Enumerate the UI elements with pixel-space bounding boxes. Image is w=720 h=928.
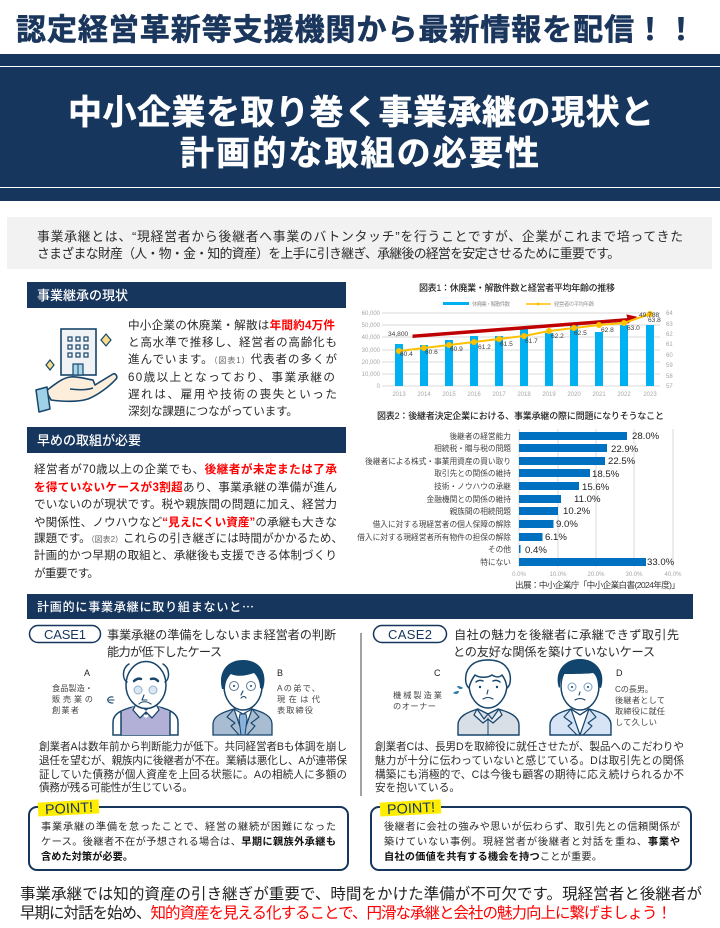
- case 1 description: 証していた債務が個人資産を上回る状態に。Aの相続人に多額の: [39, 768, 347, 781]
- chart: succession issues: 相続税・贈与税の問題: [434, 443, 511, 453]
- chart: closures and average age: 62.2: [551, 333, 564, 340]
- text block: current state: 進んでいます。（図表1）代表者の多くが: [128, 352, 337, 366]
- chart: succession issues: 18.5%: [592, 469, 620, 480]
- chart: closures and average age: 60,000: [362, 311, 381, 317]
- tag: POINT 2: POINT!: [387, 799, 435, 817]
- panel: point 1: 事業承継の準備を怠ったことで、経営の継続が困難になった: [41, 820, 336, 833]
- chart: succession issues: 金融機関との関係の維持: [426, 494, 511, 504]
- chart: closures and average age: 58: [666, 374, 673, 380]
- person B label: B: [277, 668, 283, 678]
- panel: point 2: 築けていない事例。現経営者が後継者と対話を重ね、事業や: [384, 835, 680, 848]
- case 2 description: [375, 740, 684, 794]
- chart: closures and average age: 63.0: [627, 325, 640, 332]
- chart: succession issues: 後継者の経営能力: [449, 431, 511, 441]
- text block: early action: [34, 462, 343, 580]
- section heading: if not planned: [27, 594, 693, 619]
- chart: succession issues: 取引先との関係の維持: [434, 468, 511, 478]
- person C label: [393, 668, 442, 711]
- text block: early action: 計画的かつ早期の取組と、承継後も支援できる体制づくり: [34, 548, 337, 562]
- case 2 description: 構築にも消極的で、Cは今後も顧客の期待に応え続けられるか不: [375, 768, 684, 781]
- person D label: D: [616, 668, 623, 678]
- chart: succession issues: 28.0%: [632, 431, 660, 442]
- text block: current state: 60歳以上となっており、事業承継の: [128, 371, 335, 384]
- chart: succession issues: 15.6%: [582, 482, 610, 493]
- chart: closures and average age: 2020: [567, 392, 581, 398]
- chart: closures and average age: 61.2: [478, 344, 491, 351]
- panel: point 1: 含めた対策が必要。: [41, 850, 133, 863]
- chart: closures and average age: 2014: [417, 392, 431, 398]
- person D label: [615, 668, 665, 727]
- chart: closures and average age: 2016: [467, 392, 481, 398]
- chart: succession issues: 10.2%: [563, 506, 591, 517]
- closing message: [20, 885, 702, 922]
- text block: current state: と高水準で推移し、経営者の高齢化も: [128, 335, 337, 349]
- person D label: 後継者として: [615, 695, 665, 705]
- person C label: C: [434, 668, 441, 678]
- chart: succession issues: 技術・ノウハウの承継: [434, 481, 511, 491]
- text block: current state: [128, 318, 337, 418]
- section heading: if not planned: 計画的に事業承継に取り組まないと…: [37, 598, 254, 615]
- chart: closures and average age: [362, 300, 673, 398]
- person A label: 販売業の: [52, 694, 93, 704]
- text block: early action: を得ていないケースが3割超あり、事業承継の準備が進ん: [34, 480, 337, 494]
- chart: succession issues: 9.0%: [556, 519, 578, 530]
- case 2 badge: CASE2: [388, 627, 432, 642]
- chart: closures and average age: 30,000: [362, 348, 381, 354]
- chart title 1: 図表1：休廃業・解散件数と経営者平均年齢の推移: [419, 282, 615, 293]
- chart: closures and average age: 60.6: [425, 349, 438, 356]
- person A label: [52, 668, 93, 715]
- person D label: Cの長男。: [615, 685, 653, 694]
- chart: closures and average age: 2013: [392, 392, 406, 398]
- chart: succession issues: 22.9%: [611, 444, 639, 455]
- chart: closures and average age: 57: [666, 384, 673, 390]
- chart: succession issues: 借入に対する現経営者の個人保障の解除: [373, 519, 511, 529]
- chart: succession issues: 30.0%: [625, 572, 643, 578]
- chart: succession issues: その他: [488, 544, 511, 554]
- chart: closures and average age: 2018: [517, 392, 531, 398]
- case 2 title: との友好な関係を築けていないケース: [453, 644, 655, 659]
- case 2 title: 自社の魅力を後継者に承継できず取引先: [454, 627, 679, 642]
- closing message: 事業承継では知的資産の引き継ぎが重要で、時間をかけた準備が不可欠です。現経営者と後継者が: [20, 885, 702, 903]
- chart: closures and average age: 59: [666, 363, 673, 369]
- chart: succession issues: 20.0%: [587, 572, 605, 578]
- arrow: upward trend: [413, 315, 636, 338]
- case 2 description: 創業者Cは、長男Dを取締役に就任させたが、製品へのこだわりや: [375, 740, 684, 753]
- chart: succession issues: 0.0%: [512, 572, 526, 578]
- text block: early action: でいないのが現状です。税や親族間の問題に加え、経営力: [34, 497, 337, 511]
- chart: succession issues: 11.0%: [574, 494, 601, 505]
- chart: closures and average age: 62: [666, 332, 673, 338]
- panel: point 1: [29, 798, 348, 870]
- panel: point 1: ケース。後継者不在が予想される場合は、早期に親族外承継も: [41, 835, 336, 848]
- chart: closures and average age: 63: [666, 322, 673, 328]
- chart: closures and average age: 2021: [592, 392, 606, 398]
- panel: point 2: [371, 798, 691, 870]
- case 1 title: 事業承継の準備をしないまま経営者の判断: [107, 627, 336, 642]
- icon: person D eldest son: [550, 659, 611, 735]
- person D label: して久しい: [615, 717, 657, 727]
- chart: closures and average age: 60.4: [400, 351, 413, 358]
- legend: 経営者の平均年齢: [554, 300, 594, 308]
- case 2 title: [453, 627, 679, 659]
- person B label: 現在は代: [277, 694, 320, 704]
- chart: succession issues: 40.0%: [664, 572, 682, 578]
- legend: 休廃業・解散件数: [472, 300, 510, 308]
- chart: closures and average age: 34,800: [388, 331, 409, 338]
- chart: succession issues: 特にない: [480, 557, 511, 567]
- legend: [443, 300, 594, 308]
- chart: closures and average age: 61: [666, 342, 673, 348]
- panel: current state heading: [27, 282, 346, 308]
- case 1 badge: CASE1: [44, 627, 86, 642]
- icon: person C owner: [453, 660, 519, 735]
- text block: early action: 経営者が70歳以上の企業でも、後継者が未定または了承: [34, 462, 337, 476]
- chart: succession issues: 0.4%: [525, 545, 547, 556]
- intro panel: [7, 217, 712, 269]
- main title: [68, 94, 654, 173]
- person A label: 創業者: [52, 705, 79, 715]
- icon: hand holding building: [36, 329, 117, 412]
- chart: closures and average age: 61.5: [500, 341, 513, 348]
- closing message: 早期に対話を始め、知的資産を見える化することで、円滑な承継と会社の魅力向上に繋げましょう！: [20, 904, 672, 922]
- tag: POINT 1: POINT!: [45, 799, 93, 817]
- chart: closures and average age: 0: [377, 384, 381, 390]
- text block: current state: 遅れは、雇用や技術の喪失といった: [128, 387, 337, 401]
- chart: closures and average age: 40,000: [362, 335, 381, 341]
- person B label: Aの弟で、: [277, 683, 320, 693]
- case 2 description: 安を抱いている。: [375, 781, 460, 794]
- chart: succession issues: 後継者による株式・事業用資産の買い取り: [365, 456, 511, 466]
- chart: closures and average age: 10,000: [362, 372, 381, 378]
- chart: succession issues: 22.5%: [608, 456, 636, 467]
- case 2 badge: [374, 626, 446, 642]
- chart: closures and average age: 50,000: [362, 323, 381, 329]
- chart: closures and average age: 63.8: [648, 317, 661, 324]
- chart: closures and average age: 61.7: [525, 338, 538, 345]
- text block: current state: 中小企業の休廃業・解散は年間約4万件: [128, 318, 335, 332]
- top banner heading: 認定経営革新等支援機関から最新情報を配信！！: [16, 14, 696, 47]
- text block: current state: 深刻な課題につながっています。: [128, 404, 298, 418]
- chart: closures and average age: 60.9: [450, 346, 463, 353]
- case 1 title: [107, 627, 336, 659]
- chart: succession issues: 10.0%: [549, 572, 567, 578]
- intro panel: 事業承継とは、“現経営者から後継者へ事業のバトンタッチ”を行うことですが、企業がこれまで培ってきた: [37, 229, 683, 244]
- chart: closures and average age: 20,000: [362, 360, 381, 366]
- chart: closures and average age: 62.8: [601, 327, 614, 334]
- chart: closures and average age: 2022: [617, 392, 631, 398]
- chart title 2: 図表2：後継者決定企業における、事業承継の際に問題になりそうなこと: [377, 410, 664, 421]
- case 2 description: 魅力が十分に伝わっていないと感じている。Dは取引先との関係: [375, 754, 684, 767]
- person C label: 機械製造業: [393, 690, 442, 700]
- chart: succession issues: 親族間の相続問題: [449, 506, 511, 516]
- chart: succession issues: 借入に対する現経営者所有物件の担保の解除: [357, 532, 511, 542]
- chart: closures and average age: 62.5: [574, 330, 587, 337]
- chart: closures and average age: 2017: [492, 392, 506, 398]
- chart: closures and average age: 60: [666, 353, 673, 359]
- icon: person A elderly founder: [108, 662, 178, 735]
- text block: early action: が重要です。: [34, 566, 99, 580]
- text block: early action: 課題です。（図表2）これらの引き継ぎには時間がかかるため、: [34, 531, 343, 545]
- panel: early action heading: [27, 427, 346, 453]
- chart: closures and average age: 64: [666, 311, 673, 317]
- person C label: のオーナー: [393, 702, 436, 711]
- chart: closures and average age: 49,788: [639, 312, 660, 319]
- case 1 description: 創業者Aは数年前から判断能力が低下。共同経営者Bも体調を崩し: [39, 740, 347, 753]
- case 1 badge: [30, 626, 100, 642]
- panel: early action heading: 早めの取組が必要: [37, 433, 141, 448]
- panel: current state heading: 事業継承の現状: [37, 288, 128, 303]
- person A label: A: [84, 668, 90, 678]
- chart: closures and average age: 2015: [442, 392, 456, 398]
- case 1 description: 債務が残る可能性が生じている。: [39, 781, 193, 794]
- intro panel: さまざまな財産（人・物・金・知的資産）を上手に引き継ぎ、承継後の経営を安定させるために重要です。: [37, 246, 620, 261]
- chart: closures and average age: 2023: [643, 392, 657, 398]
- case 1 description: [39, 740, 347, 794]
- text block: early action: や関係性、ノウハウなど“見えにくい資産”の承継も大きな: [34, 515, 337, 529]
- title band: [0, 54, 720, 201]
- chart: closures and average age: 2019: [542, 392, 556, 398]
- source note: 出展：中小企業庁「中小企業白書(2024年度)」: [515, 579, 680, 590]
- panel: point 2: 後継者に会社の強みや思いが伝わらず、取引先との信頼関係が: [384, 820, 680, 833]
- person D label: 取締役に就任: [615, 706, 665, 716]
- icon: person B brother: [213, 660, 272, 735]
- main title: 計画的な取組の必要性: [180, 135, 539, 173]
- case 1 description: 退任を望むが、親族内に後継者が不在。業績は悪化し、Aが連帯保: [39, 754, 347, 767]
- chart: succession issues: 33.0%: [647, 557, 675, 568]
- main title: 中小企業を取り巻く事業承継の現状と: [68, 94, 654, 132]
- panel: point 2: 自社の価値を共有する機会を持つことが重要。: [384, 850, 602, 863]
- person A label: 食品製造・: [52, 683, 93, 693]
- chart: succession issues: 6.1%: [545, 532, 567, 543]
- chart: succession issues: [357, 429, 682, 578]
- person B label: 表取締役: [277, 705, 313, 715]
- case 1 title: 能力が低下したケース: [107, 644, 222, 659]
- person B label: [277, 668, 320, 715]
